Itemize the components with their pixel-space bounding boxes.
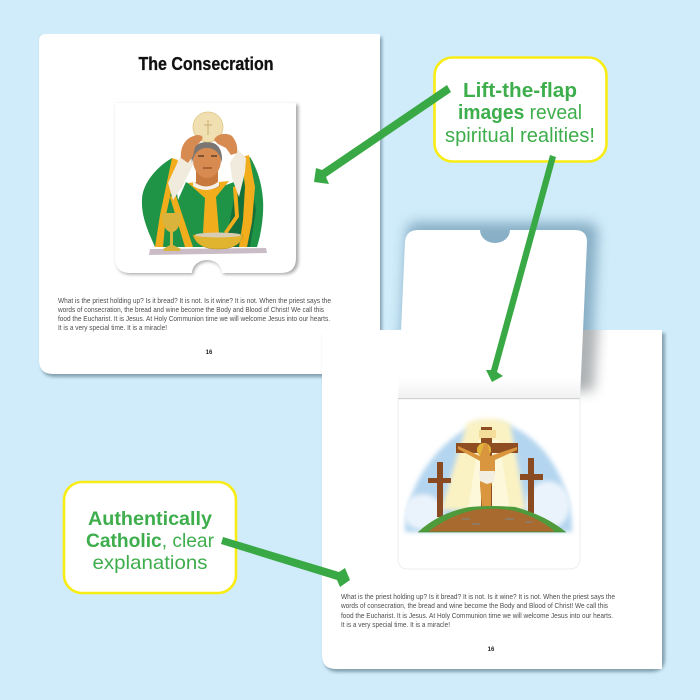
hill <box>418 506 566 532</box>
text lines: food the Eucharist. It is Jesus. At Holy Communion time we will welcome Jesus into our hearts. <box>341 612 613 620</box>
page number: 16 <box>488 647 495 653</box>
text lines: words of consecration, the bread and wine become the Body and Blood of Christ! We call this <box>340 602 608 610</box>
text lines: What is the priest holding up? Is it bread? It is not. Is it wine? It is not. When the priest says the <box>341 593 615 601</box>
body text: words of consecration, the bread and wine become the Body and Blood of Christ! We call this <box>57 306 324 314</box>
loincloth <box>479 471 495 484</box>
body text <box>57 297 331 332</box>
title placard <box>479 430 496 438</box>
callout: lift-the-flap: spiritual realities! <box>445 124 595 147</box>
gold bands <box>155 155 255 247</box>
bowl <box>193 235 243 249</box>
body text: What is the priest holding up? Is it bread? It is not. Is it wine? It is not. When the priest says the <box>58 297 331 305</box>
hands <box>181 135 203 163</box>
panel: right book page <box>322 300 665 672</box>
sky dome <box>405 423 572 532</box>
callout: authentically catholic: Catholic, clear <box>86 530 214 552</box>
chalice <box>162 213 181 251</box>
flap card with priest <box>115 103 298 274</box>
host <box>193 112 223 142</box>
page number: 16 <box>206 350 213 356</box>
flap shadow on background <box>394 215 605 330</box>
side cross right <box>520 458 543 513</box>
callout: authentically catholic: Authentically <box>88 508 212 530</box>
text lines: It is a very special time. It is a miracle! <box>341 621 450 629</box>
flap shadow on page <box>580 330 606 399</box>
inner flap page with crucifixion <box>398 399 580 569</box>
arrow: to priest image <box>314 85 451 184</box>
hair <box>191 142 222 163</box>
face <box>193 142 221 178</box>
neck and collar <box>193 170 220 190</box>
callout: authentically catholic: explanations <box>92 552 208 574</box>
side cross left <box>428 462 451 517</box>
callout: lift-the-flap <box>434 58 606 162</box>
callout: authentically catholic <box>64 482 236 593</box>
arrow: to page text <box>221 537 350 587</box>
heading: The Consecration: The Consecration <box>138 54 274 74</box>
chasuble <box>142 157 263 247</box>
arrow: to crucifix <box>486 155 556 382</box>
callout: lift-the-flap: Lift-the-flap <box>463 79 577 102</box>
body of Christ <box>458 444 517 507</box>
icon: priest raising host <box>142 112 267 255</box>
clouds <box>403 481 570 530</box>
altar <box>149 248 267 255</box>
panel: left book page <box>39 34 382 377</box>
callout: lift-the-flap: images reveal <box>458 101 582 124</box>
text lines <box>340 593 615 629</box>
body text: food the Eucharist. It is Jesus. At Holy Communion time we will welcome Jesus into our hearts. <box>58 315 330 323</box>
flap lifted up <box>398 230 587 398</box>
light rays <box>441 418 526 510</box>
halo <box>477 443 491 457</box>
central cross <box>456 427 518 515</box>
sleeves <box>168 155 194 200</box>
icon: crucifixion scene <box>403 418 572 532</box>
body text: It is a very special time. It is a miracle! <box>58 324 167 332</box>
